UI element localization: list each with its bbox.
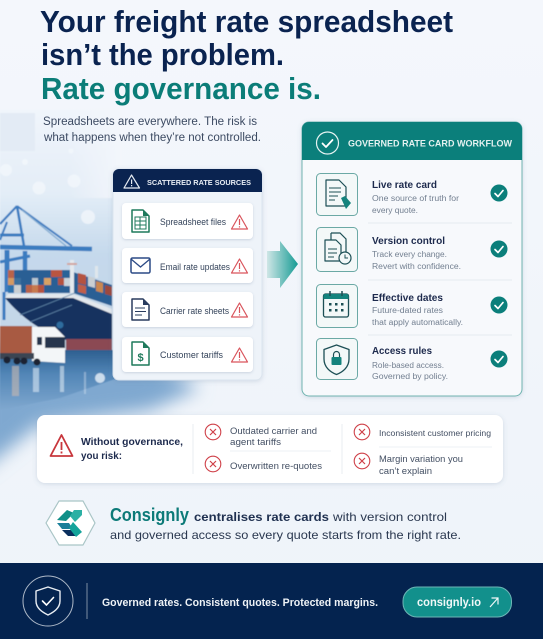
consignly statement [110, 505, 461, 542]
item: carrier rate sheets [122, 292, 253, 327]
panel header [113, 169, 262, 192]
hull [5, 294, 112, 314]
risk: overwritten re-quotes [205, 456, 323, 472]
consignly statement: Consignly [110, 505, 189, 525]
risk: outdated tariffs: Outdated carrier and [230, 426, 317, 436]
row: access rules: Governed by policy. [372, 372, 448, 381]
subtitle: Spreadsheets are everywhere. The risk is [43, 116, 257, 128]
title: isn’t the problem. [41, 37, 284, 72]
workflow header [302, 122, 522, 160]
row: access rules: Role-based access. [372, 361, 444, 370]
risk heading: Without governance, [81, 436, 183, 448]
consignly statement: and governed access so every quote starts from the right rate. [110, 528, 461, 542]
port and ship photo scene [0, 108, 200, 472]
icon: shield badge [23, 576, 73, 626]
network nodes [0, 148, 95, 224]
risk: outdated tariffs [205, 424, 317, 447]
reflections [12, 366, 19, 396]
item: email rate updates [122, 248, 253, 283]
item: spreadsheet files: Spreadsheet files [160, 217, 227, 227]
item: carrier rate sheets: Carrier rate sheets [160, 306, 230, 316]
row: version control [316, 228, 508, 272]
row: effective dates: that apply automatically. [372, 318, 463, 327]
containers [8, 260, 112, 306]
risk: margin variation: Margin variation you [379, 454, 463, 464]
website button: consignly.io [417, 595, 481, 609]
row: version control: Revert with confidence. [372, 262, 461, 271]
item: customer tariffs [122, 337, 253, 372]
website button [403, 587, 512, 617]
footer band [0, 563, 543, 639]
row: live rate card [316, 174, 508, 216]
risk heading [81, 436, 183, 462]
panel: governed rate card workflow [302, 122, 522, 396]
title [40, 4, 453, 106]
row: live rate card: every quote. [372, 206, 418, 215]
risk: inconsistent pricing [354, 424, 491, 440]
row: access rules [316, 338, 508, 381]
risk: overwritten re-quotes: Overwritten re-quotes [230, 461, 323, 471]
consignly statement: centralises rate cards [194, 510, 329, 524]
risk: outdated tariffs: agent tariffs [230, 437, 282, 447]
icon: consignly logo [46, 501, 95, 545]
item: email rate updates: Email rate updates [160, 262, 231, 272]
footer tagline: Governed rates. Consistent quotes. Protected margins. [102, 597, 378, 609]
crane [0, 206, 92, 320]
panel: without governance risks [37, 415, 503, 483]
row: live rate card: One source of truth for [372, 194, 459, 203]
icon: warning triangle [50, 435, 72, 456]
row: version control: Track every change. [372, 250, 447, 259]
panel header: SCATTERED RATE SOURCES [147, 178, 251, 187]
title: Your freight rate spreadsheet [40, 4, 453, 39]
risk heading: you risk: [81, 450, 122, 462]
item: customer tariffs: Customer tariffs [160, 350, 224, 360]
row: access rules: Access rules [372, 345, 432, 357]
subtitle [43, 116, 261, 144]
workflow header: GOVERNED RATE CARD WORKFLOW [348, 138, 512, 150]
risk: margin variation: can’t explain [379, 466, 432, 476]
risk: margin variation [354, 453, 463, 476]
risk: inconsistent pricing: Inconsistent customer pricing [379, 428, 491, 438]
consignly statement: with version control [332, 510, 447, 524]
subtitle: what happens when they’re not controlled. [43, 132, 261, 144]
panel: scattered rate sources [113, 169, 262, 380]
row: effective dates: Future-dated rates [372, 306, 443, 315]
arrow [267, 241, 298, 288]
title: Rate governance is. [41, 71, 321, 106]
truck [0, 326, 65, 366]
water haze [0, 345, 200, 472]
row: version control: Version control [372, 235, 445, 247]
row: effective dates: Effective dates [372, 292, 443, 304]
row: live rate card: Live rate card [372, 179, 437, 191]
row: effective dates [316, 284, 508, 328]
item: spreadsheet files [122, 203, 253, 239]
item: customer tariffs: $ [137, 352, 144, 364]
